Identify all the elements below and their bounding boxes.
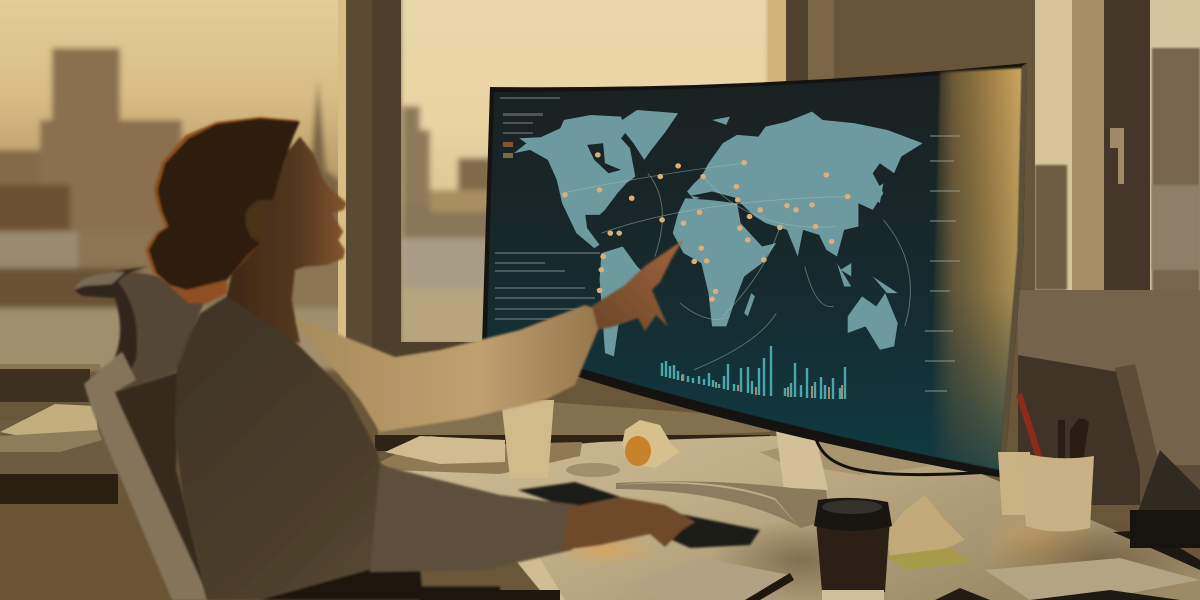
hair rim light <box>145 117 299 303</box>
woman <box>145 117 760 600</box>
left window with city skyline <box>0 0 345 370</box>
right-side screen glare <box>930 68 1022 470</box>
hand on keyboard <box>562 497 695 550</box>
desk reflections and shadows <box>550 500 1200 600</box>
black desk organiser <box>1113 450 1200 570</box>
mug with pens and second cup <box>998 393 1094 532</box>
continent: africa <box>673 198 776 326</box>
location dots <box>562 152 851 302</box>
sticky note <box>885 548 972 570</box>
continent: hudson bay <box>587 143 621 173</box>
monitor stand <box>616 424 990 528</box>
chair hook and neck <box>74 266 150 385</box>
continent: south america <box>600 246 648 356</box>
right dashboard panel <box>925 135 960 392</box>
cubicle partition on the right <box>1018 290 1200 525</box>
world map <box>514 110 923 370</box>
takeaway coffee cup <box>814 498 892 600</box>
paper cup <box>501 400 554 478</box>
back desk behind the monitor <box>375 400 770 451</box>
right windows and frames <box>1035 0 1200 298</box>
middle window with city skyline <box>400 0 770 345</box>
sea: mediterranean <box>691 192 737 203</box>
ear <box>245 203 268 237</box>
crumpled tissue <box>887 495 965 558</box>
pointing hand <box>592 240 683 331</box>
back-left desk with papers <box>0 404 120 504</box>
papers behind the stand <box>760 436 930 475</box>
continent: north america <box>514 115 635 248</box>
continent: greenland <box>617 110 678 160</box>
lower left desk shadow <box>420 590 560 600</box>
right wall panel <box>834 0 1036 300</box>
connection arcs <box>562 163 910 370</box>
office chair <box>74 266 210 600</box>
small round object on desk <box>566 463 620 477</box>
desk front edge <box>515 550 565 600</box>
lower arm sleeve cuff <box>370 465 578 572</box>
chair mesh back <box>115 372 210 600</box>
neck and face <box>227 137 347 343</box>
chair lower frame <box>84 352 210 600</box>
left dashboard panel <box>495 97 600 320</box>
crumpled wrapper with orange light <box>622 420 680 468</box>
curved monitor <box>482 63 1027 478</box>
window frames <box>0 0 834 402</box>
pointing arm sleeve <box>292 305 605 432</box>
keyboard <box>518 482 760 548</box>
torso shirt <box>175 297 500 600</box>
hair and bun <box>149 118 300 290</box>
documents at the bottom of the desk <box>625 558 1200 600</box>
dark trousers <box>260 567 500 600</box>
right edge of bezel <box>999 63 1027 478</box>
chair hook highlight <box>74 272 125 290</box>
chair headrest <box>110 273 205 390</box>
continent: eurasia <box>687 112 923 256</box>
bar chart on the monitor <box>662 346 845 399</box>
continent: australia <box>848 293 898 350</box>
monitor bezel <box>482 63 1027 478</box>
continent: madagascar <box>744 293 755 316</box>
monitor screen <box>487 68 1022 470</box>
main desk surface <box>385 436 1200 600</box>
lower wall left <box>0 500 170 600</box>
stack of papers on desk <box>380 436 582 474</box>
islands of south east asia <box>712 117 898 293</box>
